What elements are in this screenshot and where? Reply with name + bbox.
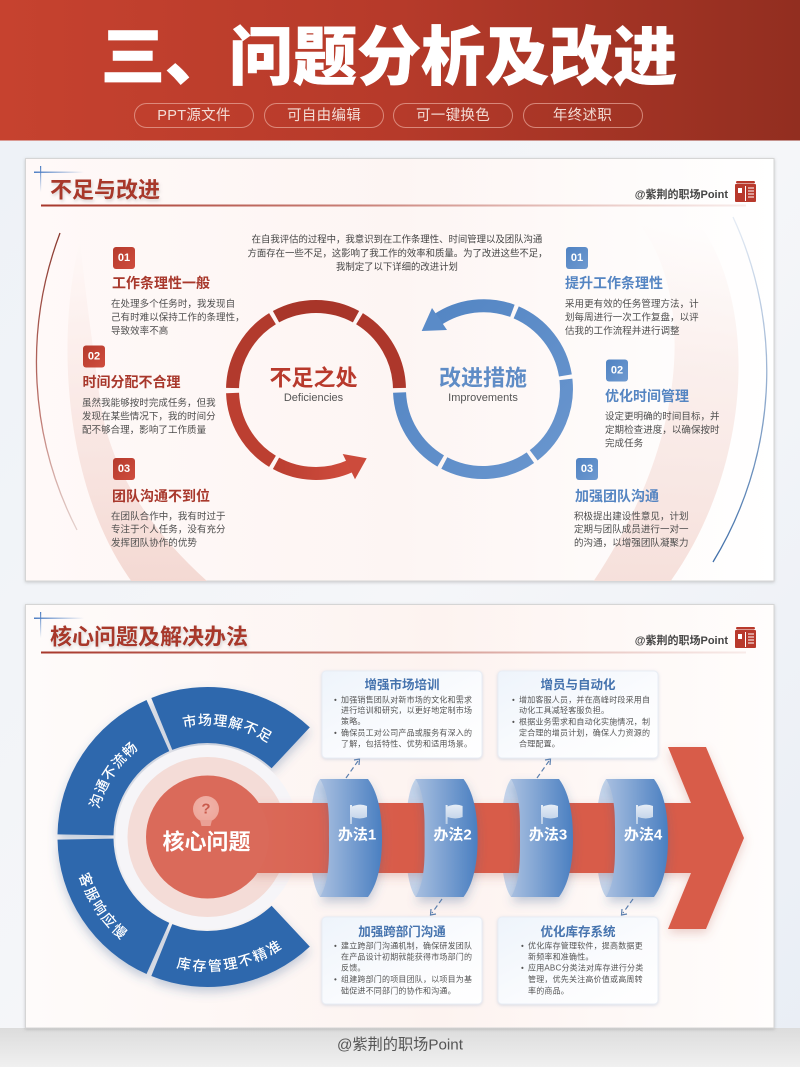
card: staffing and automation: 动化工具减轻客服负担。 xyxy=(519,705,609,715)
card: inventory system: 应用ABC分类法对库存进行分类 xyxy=(528,962,643,972)
improvement 03 xyxy=(574,458,689,549)
card: cross-department communication: 组建跨部门的项目团队，以项目为基 xyxy=(341,974,472,984)
improvement 03: 积极提出建设性意见，计划 xyxy=(574,510,689,522)
improvement 02 xyxy=(605,360,720,450)
icon: flag xyxy=(636,805,653,824)
cylinder: method 2 xyxy=(416,779,478,897)
section heading: 核心问题及解决办法 xyxy=(50,624,248,650)
card: market training xyxy=(322,671,482,758)
improvement 02: 完成任务 xyxy=(605,438,644,450)
segment label: market understanding: 市场理解不足 xyxy=(182,713,272,743)
deficiency 01 xyxy=(111,247,245,337)
improvement 03: 的沟通，以增强团队凝聚力 xyxy=(574,537,689,549)
improvement 02: 优化时间管理 xyxy=(605,388,689,404)
arrow: to card 3 xyxy=(430,899,442,915)
card: inventory system: 优化库存系统 xyxy=(540,924,616,939)
intro text: 在自我评估的过程中，我意识到在工作条理性、时间管理以及团队沟通 xyxy=(252,234,543,244)
deficiency 01: 在处理多个任务时，我发现自 xyxy=(111,298,235,310)
heading underline xyxy=(41,652,746,654)
footer watermark: @紫荆的职场Point xyxy=(337,1036,464,1054)
improvement 03: 03 xyxy=(581,463,593,475)
arrow: to card 4 xyxy=(622,899,633,915)
ring: improvements xyxy=(400,306,566,472)
card: staffing and automation: • xyxy=(512,696,515,704)
deficiency 03: 专注于个人任务，没有充分 xyxy=(111,524,226,536)
cylinder: method 1: 办法1 xyxy=(338,826,376,844)
deficiency 02: 配不够合理，影响了工作质量 xyxy=(82,424,207,436)
arrow: to card 2 xyxy=(537,759,550,778)
decorative crescents and arcs xyxy=(36,217,767,582)
card: cross-department communication: • xyxy=(334,975,337,984)
panel: deficiencies and improvements xyxy=(26,158,774,582)
intro text: 方面存在一些不足，这影响了我工作的效率和质量。为了改进这些不足， xyxy=(247,248,548,258)
donut of problems xyxy=(52,686,312,998)
cylinder: method 3 xyxy=(511,779,573,897)
card: market training: 加强销售团队对新市场的文化和需求 xyxy=(341,694,472,704)
segment label: customer service: 客服响应慢 xyxy=(78,872,128,940)
improvement 01: 划每周进行一次工作复盘，以评 xyxy=(565,312,699,324)
main arrow xyxy=(250,747,744,929)
improvement 01: 提升工作条理性 xyxy=(565,275,663,291)
tag pills xyxy=(134,104,642,128)
card: cross-department communication: 建立跨部门沟通机制，确保研发团队 xyxy=(341,940,472,950)
deficiency 03 xyxy=(111,458,226,549)
intro text xyxy=(247,234,548,272)
card: market training: 策略。 xyxy=(341,716,366,726)
improvement 02: 设定更明确的时间目标，并 xyxy=(605,410,720,422)
tag pills: 可自由编辑 xyxy=(287,107,361,124)
card: staffing and automation: • xyxy=(512,718,515,726)
label: deficiencies: 不足之处 xyxy=(269,366,358,390)
header banner xyxy=(0,0,800,140)
section heading: 不足与改进 xyxy=(50,178,160,202)
card: inventory system: 优化库存管理软件，提高数据更 xyxy=(528,940,643,950)
improvement 03: 加强团队沟通 xyxy=(575,488,659,504)
card: inventory system xyxy=(498,917,658,1004)
cylinder: method 3: 办法3 xyxy=(529,826,567,844)
cylinder: method 4 xyxy=(606,779,668,897)
label: deficiencies xyxy=(269,366,358,404)
improvement 02: 02 xyxy=(611,364,623,376)
card: market training: 增强市场培训 xyxy=(364,677,440,692)
segment label: communication: 沟通不流畅 xyxy=(88,742,138,808)
label: improvements: 改进措施 xyxy=(439,366,527,390)
label: deficiencies: Deficiencies xyxy=(284,392,344,404)
card: cross-department communication: 在产品设计初期就能获得市场部门的 xyxy=(341,952,472,962)
deficiency 01: 己有时难以保持工作的条理性， xyxy=(111,312,245,324)
blue cross accent xyxy=(34,166,84,192)
icon: flag xyxy=(446,805,463,824)
arrowhead xyxy=(343,454,367,479)
icon: book xyxy=(735,627,756,648)
heading underline xyxy=(41,204,746,206)
label: improvements: Improvements xyxy=(448,392,518,404)
deficiency 03: 发挥团队协作的优势 xyxy=(111,537,197,549)
improvement 01: 估我的工作流程并进行调整 xyxy=(565,325,680,337)
icon: flag xyxy=(541,805,558,824)
deficiency 02: 发现在某些情况下，我的时间分 xyxy=(82,410,216,422)
arrowhead xyxy=(422,308,447,331)
core halo xyxy=(116,745,300,929)
deficiency 03: 03 xyxy=(118,463,130,475)
deficiency 02 xyxy=(82,346,216,436)
card: inventory system: 管理，优先关注高价值或高周转 xyxy=(528,974,643,984)
icon: question bulb: ? xyxy=(201,800,211,818)
card: staffing and automation: 合理配置。 xyxy=(519,738,560,748)
card: market training: 了解，包括特性、优势和适用场景。 xyxy=(341,738,472,748)
ring: deficiencies xyxy=(233,306,399,479)
card: market training: • xyxy=(334,728,337,738)
panel: core problems and solutions xyxy=(24,604,776,1030)
icon: book xyxy=(735,181,756,202)
card: staffing and automation: 根据业务需求和自动化实施情况，制 xyxy=(519,716,650,726)
segment label: inventory: 库存管理不精准 xyxy=(176,940,282,972)
card: staffing and automation: 增加客服人员，并在高峰时段采用自 xyxy=(519,694,650,704)
deficiency 01: 01 xyxy=(118,252,130,264)
deficiency 02: 时间分配不合理 xyxy=(82,374,180,390)
improvement 02: 定期检查进度，以确保按时 xyxy=(605,424,720,436)
intro text: 我制定了以下详细的改进计划 xyxy=(336,261,458,272)
watermark: @紫荆的职场Point xyxy=(635,633,728,647)
watermark: @紫荆的职场Point xyxy=(635,187,728,201)
card: cross-department communication: 加强跨部门沟通 xyxy=(358,924,446,939)
tag pills: PPT源文件 xyxy=(157,107,231,124)
deficiency 01: 导致效率不高 xyxy=(111,325,168,337)
footer band xyxy=(0,1028,800,1067)
card: staffing and automation: 增员与自动化 xyxy=(540,677,616,692)
card: cross-department communication xyxy=(322,917,482,1004)
cylinder backs xyxy=(310,779,631,897)
card: market training: 确保员工对公司产品或服务有深入的 xyxy=(341,728,472,738)
card: staffing and automation: 定合理的增员计划，确保人力资源的 xyxy=(519,728,650,738)
deficiency 02: 虽然我能够按时完成任务，但我 xyxy=(82,397,216,409)
card: inventory system: 率的商品。 xyxy=(528,986,569,996)
arrow: to card 1 xyxy=(346,759,360,778)
card: cross-department communication: • xyxy=(334,942,337,950)
improvement 01: 采用更有效的任务管理方法，计 xyxy=(565,298,699,310)
tag pills: 年终述职 xyxy=(553,107,612,124)
improvement 03: 定期与团队成员进行一对一 xyxy=(574,524,689,536)
deficiency 03: 团队沟通不到位 xyxy=(112,488,210,504)
core circle xyxy=(146,776,269,898)
title: 三、问题分析及改进 xyxy=(101,22,677,94)
card: staffing and automation xyxy=(498,671,658,758)
improvement 01: 01 xyxy=(571,252,583,264)
cylinder: method 1 xyxy=(320,779,382,897)
deficiency 03: 在团队合作中，我有时过于 xyxy=(111,510,226,522)
card: market training: • xyxy=(334,696,337,704)
tag pills: 可一键换色 xyxy=(416,107,490,124)
icon: question bulb xyxy=(193,796,219,826)
card: market training: 进行培训和研究，以更好地定制市场 xyxy=(341,705,472,715)
deficiency 02: 02 xyxy=(88,350,100,362)
core label: 核心问题 xyxy=(162,830,251,854)
icon: flag xyxy=(350,805,367,824)
card: inventory system: 新频率和准确性。 xyxy=(528,952,594,962)
core halo ring xyxy=(128,757,288,917)
card: inventory system: • xyxy=(521,964,524,972)
card: cross-department communication: 反馈。 xyxy=(341,962,366,972)
improvement 01 xyxy=(565,247,699,337)
cylinder: method 4: 办法4 xyxy=(624,826,663,844)
blue cross accent xyxy=(34,612,84,638)
label: improvements xyxy=(439,366,527,404)
cylinder: method 2: 办法2 xyxy=(433,826,472,844)
card: inventory system: • xyxy=(521,942,524,950)
card: cross-department communication: 础促进不同部门的协作和沟通。 xyxy=(341,986,456,996)
deficiency 01: 工作条理性一般 xyxy=(112,275,210,291)
